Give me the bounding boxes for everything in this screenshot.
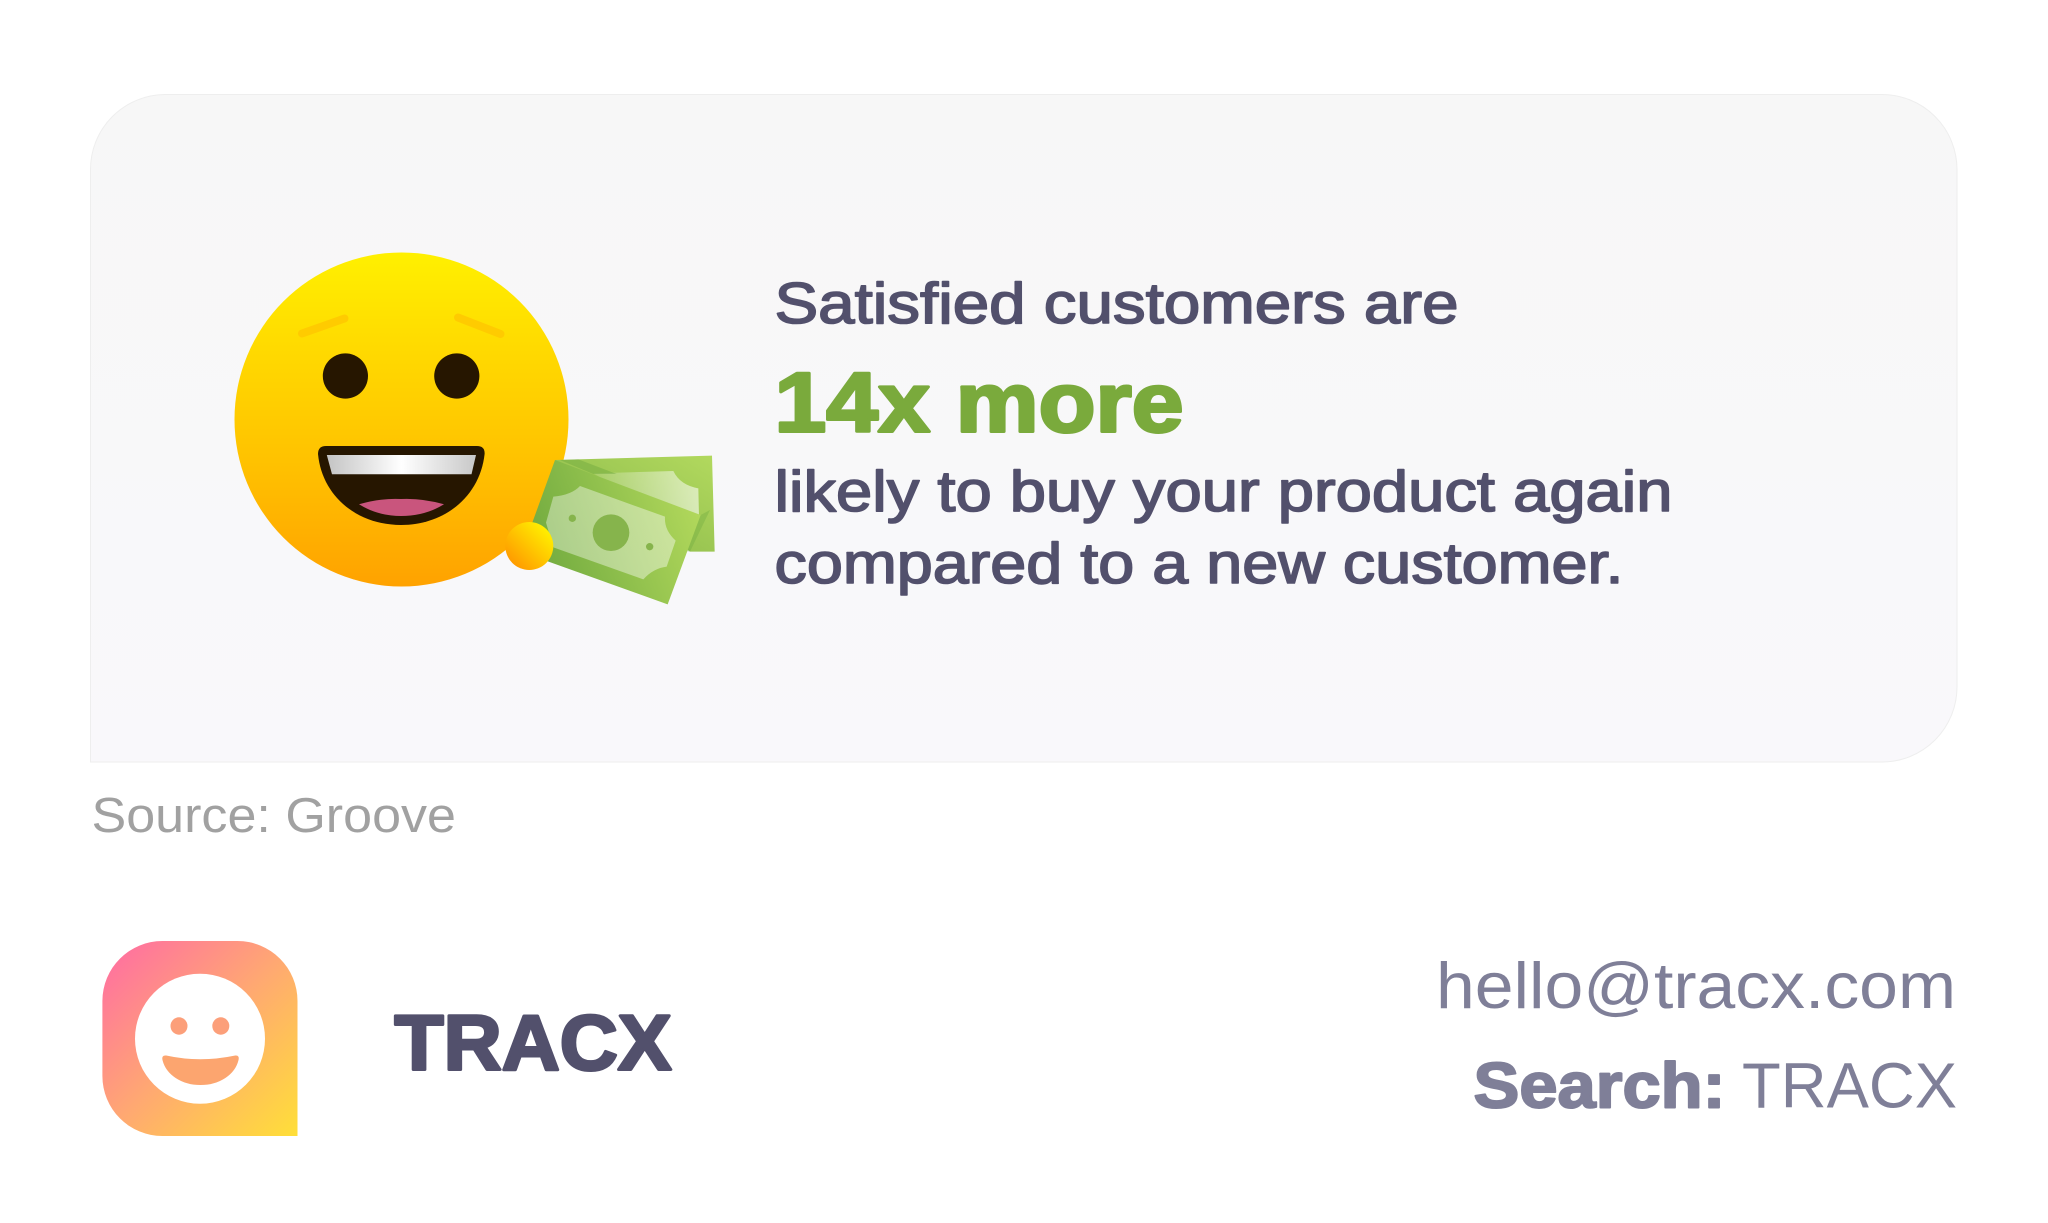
icon: hand coin	[505, 522, 553, 570]
icon: face	[234, 252, 568, 586]
icon: money bills	[522, 456, 715, 604]
text: highlight figure: 14x more	[774, 356, 1184, 450]
logo: app icon	[102, 941, 298, 1136]
text block: statistic	[774, 272, 1672, 596]
panel: statistic card	[90, 94, 1957, 762]
source note: Source: Groove	[92, 789, 456, 843]
eyes	[323, 353, 479, 399]
icon: smiling emoji holding money	[234, 252, 715, 604]
text: body line one: likely to buy your product again	[774, 460, 1672, 524]
eyebrows	[302, 318, 500, 334]
contact: search: TRACX	[1742, 1050, 1957, 1122]
contact: search	[1474, 1050, 1957, 1122]
contact: email: hello@tracx.com	[1436, 949, 1956, 1022]
text: intro line: Satisfied customers are	[774, 272, 1458, 336]
mouth	[318, 446, 485, 525]
contact: search: Search:	[1474, 1050, 1726, 1122]
logo: wordmark: TRACX	[394, 998, 672, 1086]
text: body line two: compared to a new customer.	[774, 532, 1624, 596]
